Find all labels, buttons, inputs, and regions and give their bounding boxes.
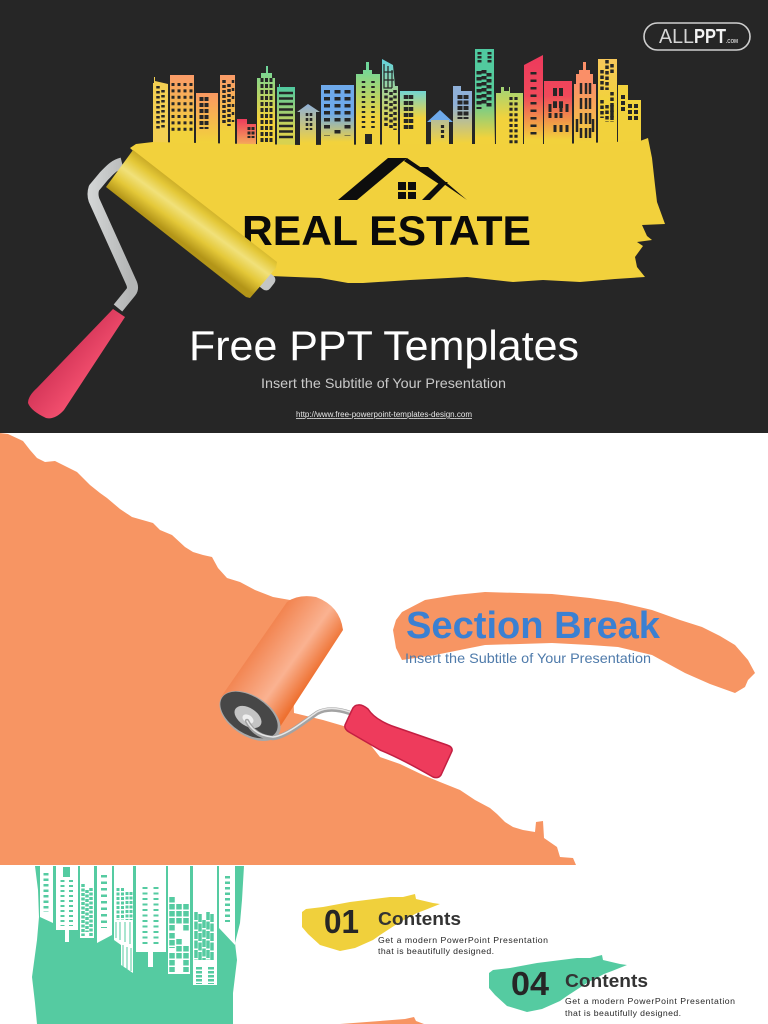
description: Get a modern PowerPoint Presentation: [378, 935, 548, 945]
panel: dark title slide: [0, 0, 768, 433]
city skyline: [153, 49, 641, 146]
green paint with hanging skyline: [32, 866, 244, 1024]
section subtitle: Insert the Subtitle of Your Presentation: [405, 650, 651, 666]
title: Free PPT Templates: Free PPT Templates: [189, 322, 579, 369]
brush: yellow: [302, 894, 440, 951]
yellow paint swath: [130, 138, 665, 283]
description: Get a modern PowerPoint Presentation: [565, 996, 735, 1006]
link: http://www.free-powerpoint-templates-design.com: [296, 410, 472, 419]
description: that is beautifully designed.: [378, 946, 494, 956]
logo: ALLPPT: .COM: [726, 39, 738, 45]
logo: ALLPPT: [644, 23, 750, 50]
number 01: 01: [324, 903, 359, 940]
orange paint area: [0, 433, 576, 865]
label: Contents: [378, 908, 461, 929]
item 04: [489, 955, 735, 1018]
building windows: [158, 52, 636, 145]
logo: house roof: [338, 158, 467, 200]
brush: orange item peeking at bottom: [340, 1017, 424, 1024]
skyline windows: [46, 867, 228, 984]
logo: ALLPPT: ALL: [659, 26, 694, 48]
label: Contents: [565, 970, 648, 991]
brush stroke behind heading: [393, 592, 755, 693]
heading: REAL ESTATE: REAL ESTATE: [242, 207, 531, 254]
heading: Section Break: Section Break: [406, 605, 661, 647]
panel: section break slide: [0, 433, 768, 866]
number 04: 04: [511, 965, 550, 1002]
icon: yellow paint roller: [28, 150, 277, 418]
subtitle: Insert the Subtitle of Your Presentation: [261, 375, 506, 391]
item 01: [302, 894, 548, 956]
description: that is beautifully designed.: [565, 1008, 681, 1018]
panel: contents slide: [32, 866, 735, 1024]
brush: green: [489, 955, 627, 1012]
logo: ALLPPT: PPT: [694, 26, 726, 48]
icon: orange paint roller: [211, 596, 452, 778]
